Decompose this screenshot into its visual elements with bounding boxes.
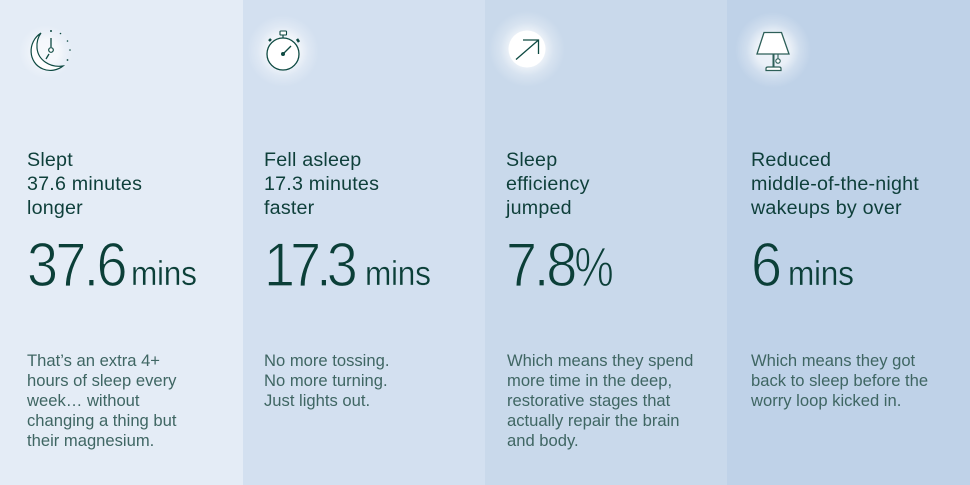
heading: faster	[264, 197, 314, 219]
body text: their magnesium.	[27, 431, 154, 450]
heading: Reduced	[751, 149, 831, 171]
body text	[507, 351, 693, 450]
heading: longer	[27, 197, 83, 219]
body text: back to sleep before the	[751, 371, 928, 390]
heading: Sleep	[506, 149, 557, 171]
stat	[506, 231, 614, 300]
stat: 7.8	[506, 231, 574, 300]
heading	[751, 149, 919, 219]
stat: 6	[751, 231, 779, 300]
heading: 37.6 minutes	[27, 173, 142, 195]
stat	[264, 231, 431, 300]
heading: 17.3 minutes	[264, 173, 379, 195]
stat	[27, 231, 197, 300]
icon: moon and clock	[28, 30, 71, 71]
body text: restorative stages that	[507, 391, 670, 410]
body text: week… without	[27, 391, 140, 410]
stat	[751, 231, 854, 300]
body text	[27, 351, 176, 450]
body text: hours of sleep every	[27, 371, 176, 390]
body text	[751, 351, 928, 410]
body text: actually repair the brain	[507, 411, 679, 430]
heading: Slept	[27, 149, 73, 171]
stat: %	[574, 235, 614, 298]
heading: wakeups by over	[751, 197, 902, 219]
body text: worry loop kicked in.	[751, 391, 901, 410]
body text: That’s an extra 4+	[27, 351, 160, 370]
body text: Which means they spend	[507, 351, 693, 370]
stat: mins	[788, 255, 854, 293]
heading	[27, 149, 142, 219]
heading	[506, 149, 590, 219]
stat: mins	[365, 255, 431, 293]
body text: more time in the deep,	[507, 371, 672, 390]
panel: sleep efficiency	[485, 0, 727, 485]
panel: slept longer	[0, 0, 243, 485]
icon: bedside lamp	[741, 18, 805, 82]
body text	[264, 351, 389, 410]
heading: middle-of-the-night	[751, 173, 919, 195]
icon: upward arrow	[496, 18, 558, 80]
heading: jumped	[506, 197, 572, 219]
body text: changing a thing but	[27, 411, 176, 430]
panel: fewer wakeups	[727, 0, 970, 485]
icon: stopwatch	[255, 23, 311, 79]
body text: Just lights out.	[264, 391, 370, 410]
body text: No more turning.	[264, 371, 388, 390]
body text: No more tossing.	[264, 351, 389, 370]
body text: Which means they got	[751, 351, 915, 370]
body text: and body.	[507, 431, 579, 450]
heading: Fell asleep	[264, 149, 361, 171]
stat: 37.6	[27, 231, 125, 300]
heading: efficiency	[506, 173, 590, 195]
heading	[264, 149, 379, 219]
stat: 17.3	[264, 231, 353, 300]
panel: fell asleep faster	[243, 0, 485, 485]
stat: mins	[131, 255, 197, 293]
